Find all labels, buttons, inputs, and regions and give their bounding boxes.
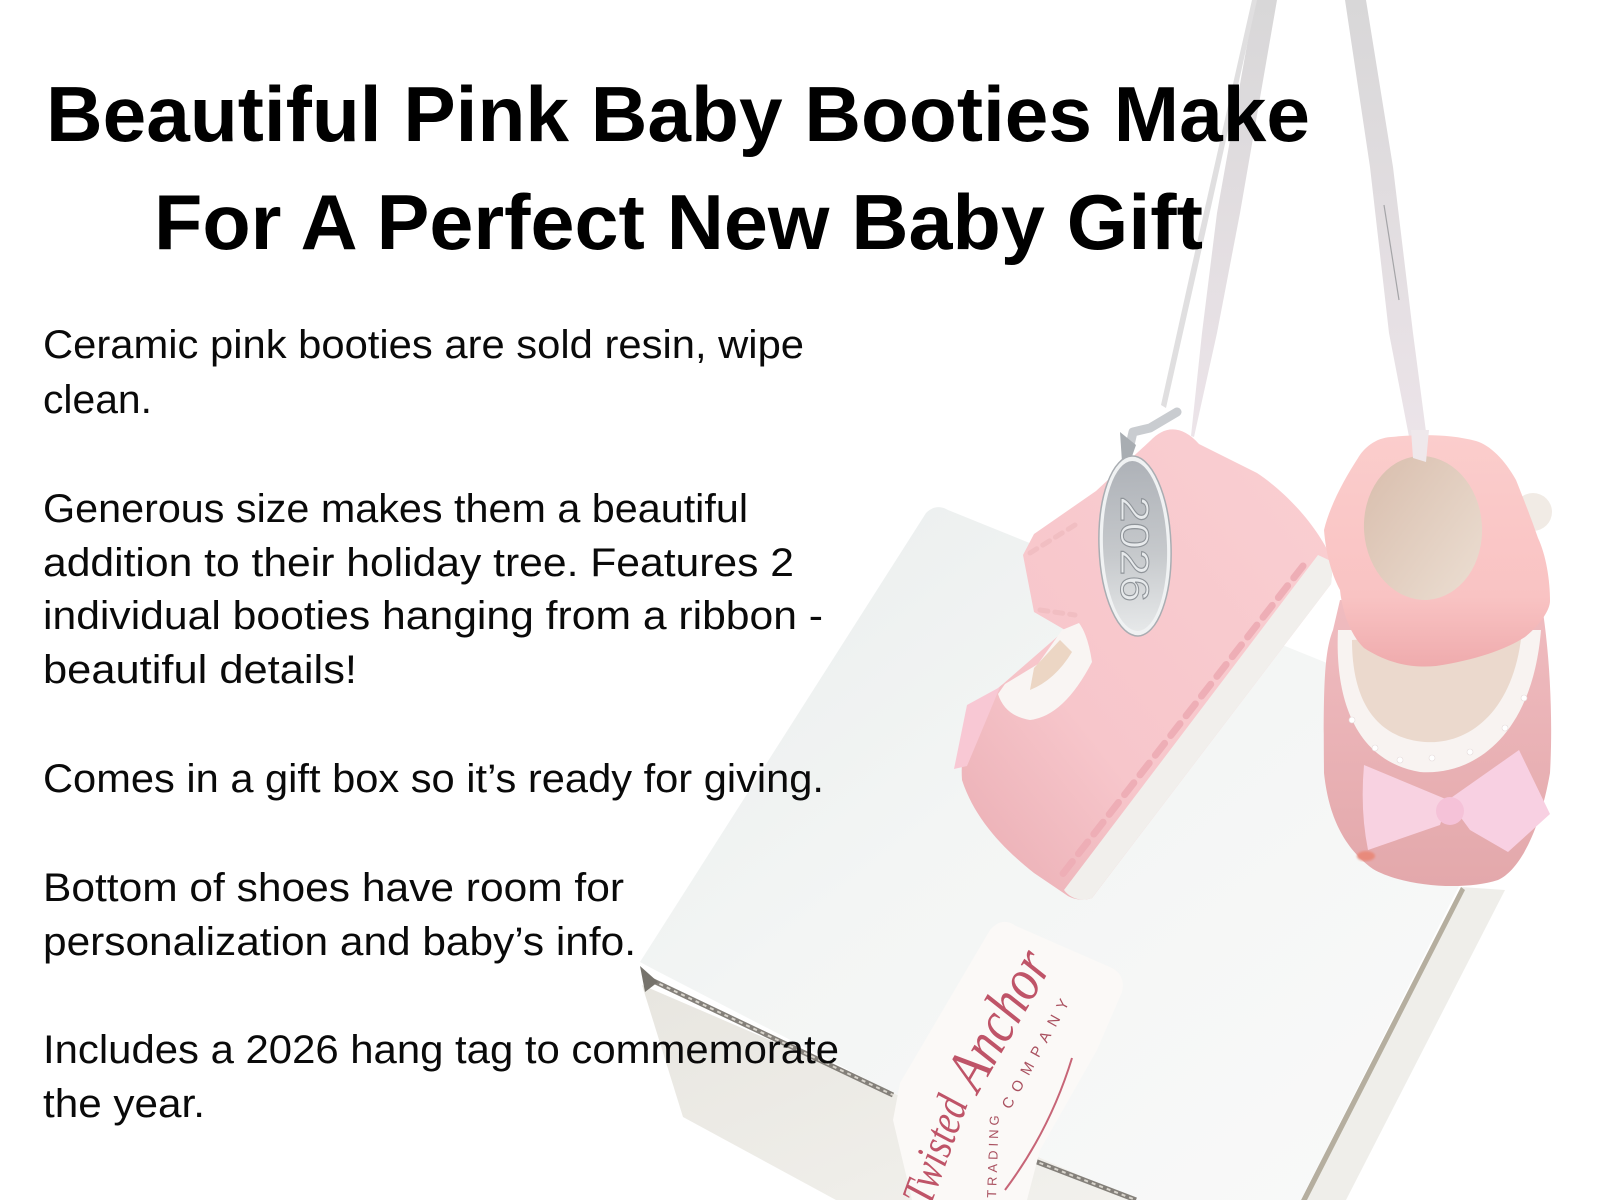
paragraph: material: clean. — [43, 378, 152, 422]
paragraph: personalization: personalization and baby’s info. — [43, 920, 636, 964]
shoe opening — [1352, 630, 1522, 742]
glitter sparkle — [1349, 695, 1527, 763]
side bow — [954, 687, 1000, 769]
paragraph: material: Ceramic pink booties are sold resin, wipe — [43, 323, 804, 367]
title — [46, 70, 1310, 266]
left bootie — [954, 412, 1333, 900]
sticker word trading: TRADING — [984, 1111, 1002, 1198]
shoe body — [1324, 600, 1551, 886]
paragraph: material — [43, 323, 804, 422]
ribbon end — [1411, 430, 1429, 462]
corrugated crease — [645, 977, 1136, 1200]
sticker subtitle: COMPANY — [999, 989, 1077, 1112]
toe mark — [1357, 851, 1375, 861]
title line 2: For A Perfect New Baby Gift — [154, 178, 1203, 266]
photo: gift box with sticker — [640, 507, 1530, 1200]
right bootie — [1324, 430, 1552, 886]
sole — [1064, 555, 1333, 900]
paragraph: gift box: Comes in a gift box so it’s ready for giving. — [43, 757, 824, 801]
hang tag — [1096, 455, 1174, 637]
sticker — [891, 922, 1123, 1200]
tag year: 2026 — [1112, 496, 1156, 602]
tag clasp — [1120, 412, 1177, 462]
ribbons — [1161, 0, 1428, 447]
paragraph: personalization — [43, 866, 636, 964]
paragraph: size: beautiful details! — [43, 648, 357, 692]
cuff — [1324, 435, 1550, 667]
body text — [43, 323, 839, 1126]
paragraph: hang tag: Includes a 2026 hang tag to commemorate — [43, 1028, 839, 1072]
sticker logo word: Anchor — [930, 937, 1065, 1103]
title line 1: Beautiful Pink Baby Booties Make — [46, 70, 1310, 158]
paragraph: personalization: Bottom of shoes have room for — [43, 866, 624, 910]
paragraph: size: Generous size makes them a beautiful — [43, 487, 748, 531]
paragraph: hang tag — [43, 1028, 839, 1126]
bow — [1363, 750, 1550, 852]
box top face — [640, 507, 1530, 1200]
glitter opening — [998, 623, 1092, 720]
paragraph: hang tag: the year. — [43, 1082, 205, 1126]
shoe body — [962, 429, 1333, 900]
cuff interior — [1359, 452, 1487, 604]
glitter band — [1338, 630, 1541, 772]
box corner shadow — [640, 966, 658, 992]
paragraph: size: individual booties hanging from a ribbon - — [43, 594, 823, 638]
paragraph: size — [43, 487, 823, 692]
stitching — [1058, 566, 1303, 880]
paragraph: size: addition to their holiday tree. Features 2 — [43, 541, 794, 585]
box side panel — [1301, 887, 1505, 1200]
box front face — [642, 985, 1136, 1200]
heel ball — [1514, 493, 1552, 531]
